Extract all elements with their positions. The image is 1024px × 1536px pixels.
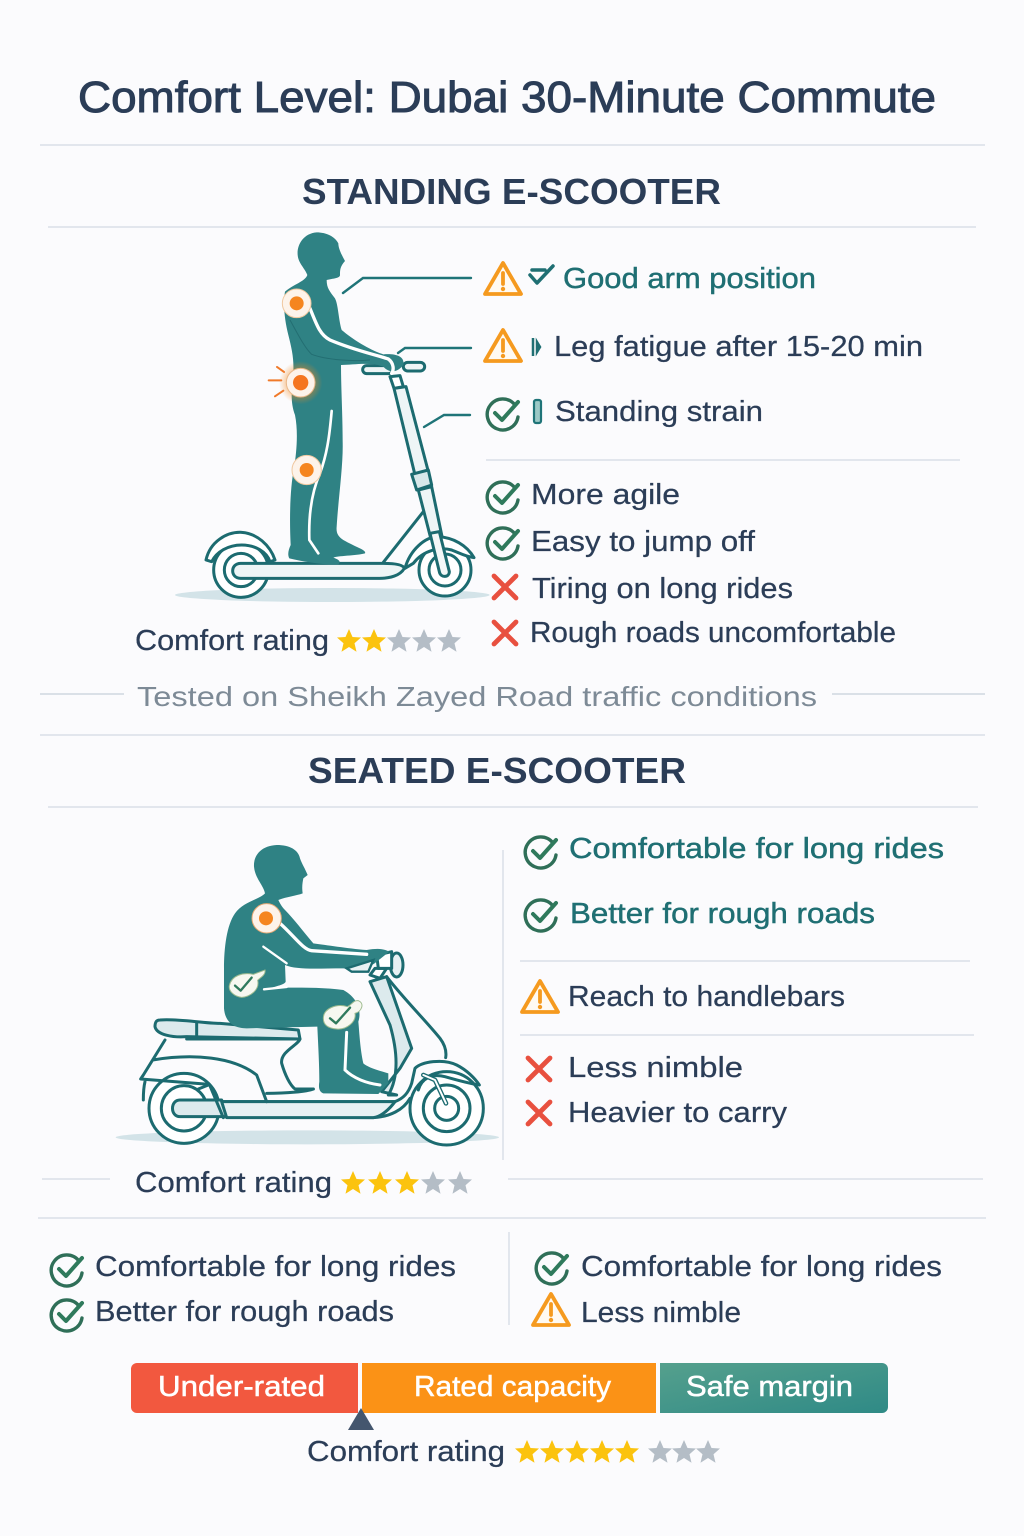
list: seated benefits [525, 833, 944, 931]
comfort rating: overall [307, 1436, 720, 1468]
illustration: seated rider on scooter [116, 845, 499, 1145]
segment: under-rated [131, 1363, 358, 1413]
item: more agile [487, 479, 680, 513]
pain point: hip [269, 361, 322, 404]
heading: seated: SEATED E-SCOOTER [308, 750, 686, 791]
list: seated drawbacks [528, 1052, 788, 1129]
pain point: knee [292, 455, 321, 485]
leader line: handlebar [398, 348, 471, 353]
capacity scale bar [131, 1363, 888, 1430]
item: comfortable for long rides: Comfortable for long rides [95, 1251, 456, 1283]
panel: standing e-scooter [48, 171, 976, 657]
list: standing pros and cons [487, 479, 896, 649]
callout: good arm position: Good arm position [563, 263, 816, 295]
comfort rating: standing [135, 625, 461, 657]
item: more agile: More agile [531, 479, 680, 511]
item: less nimble [533, 1294, 741, 1329]
comfort rating: overall: Comfort rating [307, 1436, 505, 1468]
leader line: stem [424, 415, 470, 427]
callout: standing strain: Standing strain [555, 396, 763, 428]
pain point: shoulder [252, 904, 281, 933]
heading: standing: STANDING E-SCOOTER [302, 171, 721, 212]
comfort rating: standing: Comfort rating [135, 625, 329, 657]
callout: standing strain [487, 396, 763, 430]
item: rough roads uncomfortable: Rough roads uncomfortable [530, 617, 896, 649]
summary: left column [51, 1251, 456, 1331]
check badge: knee [323, 1001, 362, 1029]
summary: right column [533, 1251, 942, 1329]
segment: under-rated: Under-rated [158, 1371, 325, 1403]
segment: safe margin: Safe margin [686, 1371, 853, 1403]
marker arrow [348, 1408, 374, 1430]
item: better for rough roads: Better for rough roads [570, 898, 875, 930]
item: reach to handlebars: Reach to handlebars [568, 981, 845, 1013]
panel: seated e-scooter [42, 750, 983, 1199]
check badge: lower back [229, 970, 265, 997]
test note: Tested on Sheikh Zayed Road traffic conditions [137, 681, 817, 712]
pain point: shoulder [282, 289, 311, 318]
leader line: arm [343, 278, 471, 293]
item: comfortable for long rides: Comfortable for long rides [581, 1251, 942, 1283]
item: tiring on long rides: Tiring on long rides [532, 573, 793, 605]
segment: rated capacity: Rated capacity [414, 1371, 612, 1403]
title: Comfort Level: Dubai 30-Minute Commute [78, 73, 936, 122]
segment: rated capacity [362, 1363, 656, 1413]
comfort rating: seated: Comfort rating [135, 1167, 332, 1199]
item: easy to jump off: Easy to jump off [531, 526, 756, 558]
comfort rating: seated [135, 1167, 472, 1199]
item: less nimble: Less nimble [568, 1052, 743, 1084]
callout: leg fatigue: Leg fatigue after 15-20 min [554, 331, 923, 363]
segment: safe margin [660, 1363, 888, 1413]
item: comfortable for long rides: Comfortable for long rides [569, 833, 944, 865]
item: better for rough roads: Better for rough roads [95, 1296, 394, 1328]
illustration: standing rider on scooter [175, 232, 490, 602]
item: heavier to carry: Heavier to carry [568, 1097, 788, 1129]
item: less nimble: Less nimble [581, 1297, 741, 1329]
